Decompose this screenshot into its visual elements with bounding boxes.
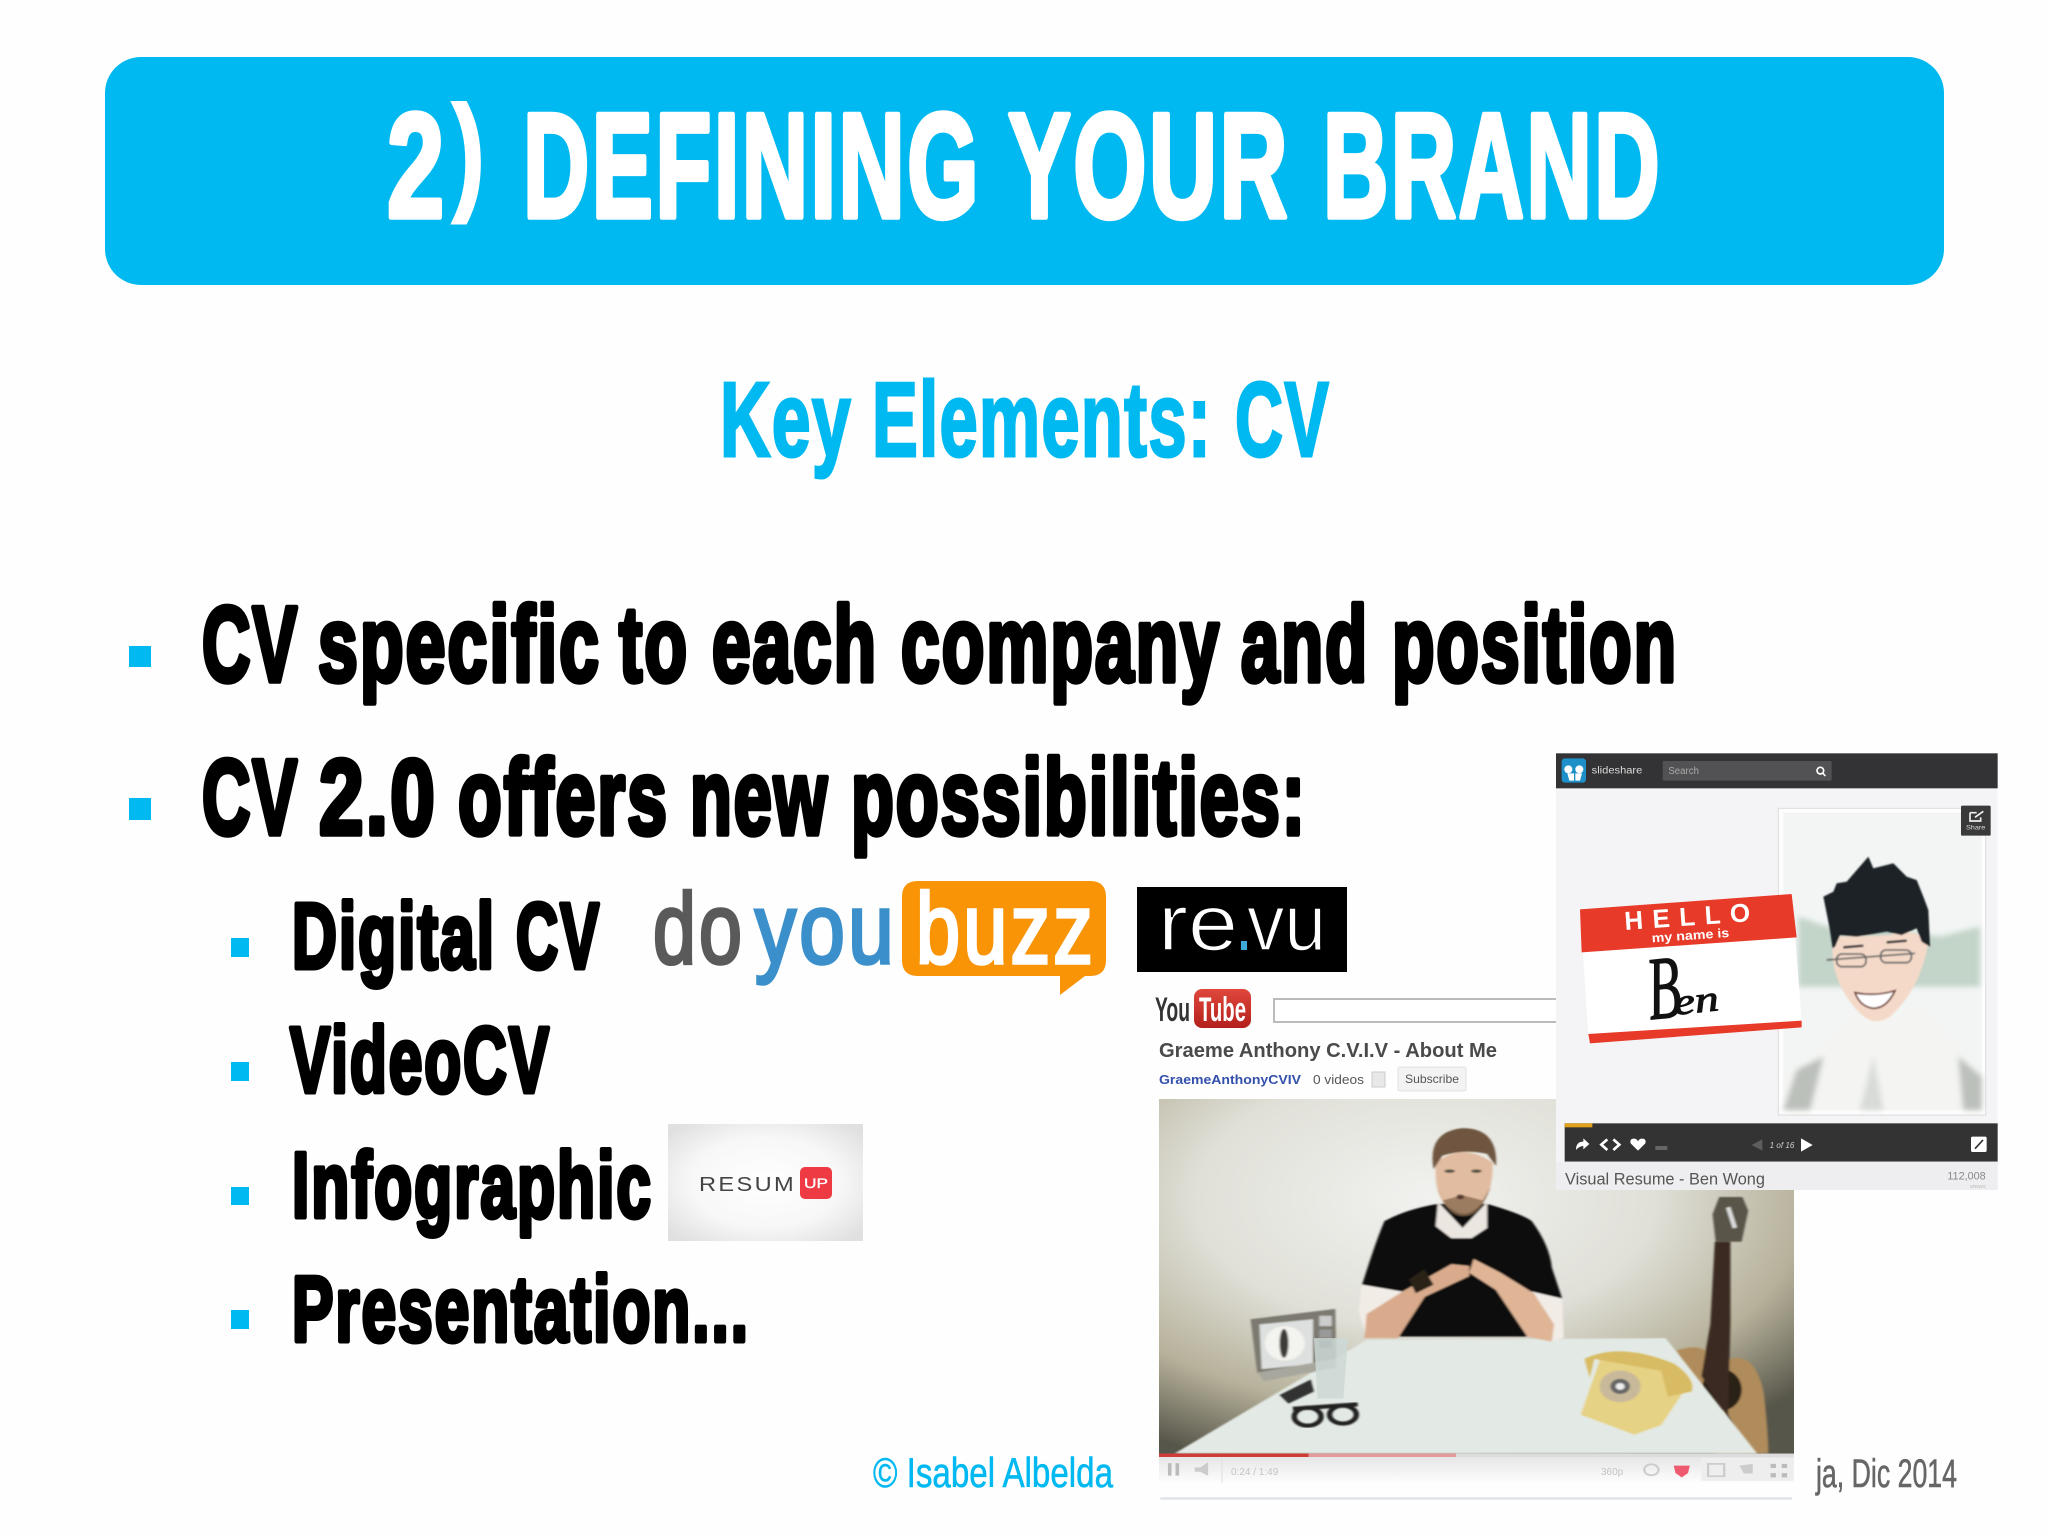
bullet 1 text: and — [1241, 584, 1369, 704]
title text: 2 — [387, 82, 447, 249]
channel row: 0 videos — [1313, 1072, 1365, 1087]
YouTube logo: You — [1155, 991, 1190, 1029]
sub bullet text: Digital CV: CV — [516, 884, 601, 988]
portrait man — [1783, 857, 1982, 1110]
bullet 1 text — [202, 584, 1678, 704]
slideshare footer: 112,008 — [1947, 1170, 1986, 1182]
title text: BRAND — [1323, 82, 1662, 249]
bullet 2 text: CV — [202, 737, 299, 857]
glass of water — [1314, 1338, 1348, 1398]
handwritten signature: B — [1642, 937, 1686, 1039]
slideshare footer: views — [1970, 1184, 1986, 1190]
video frame — [1159, 1099, 1794, 1500]
screenshot: slideshare visual resume — [1556, 753, 1998, 1190]
title text — [387, 81, 1662, 249]
bullet 2 text: offers — [458, 737, 669, 857]
bullet 2 text: new — [690, 737, 829, 857]
logo: revu: re — [1158, 878, 1238, 967]
bullet 1 text: to — [619, 584, 689, 704]
slideshare panel background — [1556, 753, 1998, 1190]
title text: ) — [453, 81, 484, 224]
logo: resumup — [668, 1124, 863, 1241]
player time: 0:24 / 1:49 — [1231, 1467, 1279, 1478]
bullet 1 text: CV — [202, 584, 299, 704]
handwritten signature: en — [1671, 977, 1721, 1023]
portrait photo — [1778, 808, 1986, 1115]
yellow telephone — [1581, 1351, 1692, 1435]
sub bullet marker: Presentation — [231, 1310, 249, 1329]
slideshare footer — [1556, 1162, 1998, 1190]
date credit: ja, Dic 2014 — [1815, 1452, 1957, 1496]
keys — [1280, 1380, 1314, 1404]
sub bullet list — [231, 884, 750, 1361]
title text: YOUR — [1008, 82, 1290, 249]
logo: doyoubuzz: do — [653, 873, 745, 985]
spectacles — [1293, 1404, 1358, 1426]
slideshare player bar — [1565, 1123, 1998, 1162]
channel row: Subscribe — [1405, 1072, 1459, 1086]
bottom rule — [1160, 1497, 1792, 1500]
player controls — [1159, 1457, 1794, 1483]
television — [1251, 1309, 1336, 1381]
subtitle: Key — [720, 361, 852, 479]
logo: resumup: UP — [804, 1175, 828, 1191]
title text: DEFINING — [523, 82, 981, 249]
logo: resumup: RESUM — [699, 1174, 796, 1196]
logo: revu: vu — [1247, 878, 1326, 967]
subtitle: CV — [1235, 361, 1330, 479]
player resolution: 360p — [1601, 1467, 1624, 1478]
YouTube logo — [1155, 989, 1251, 1029]
slideshare footer: Visual Resume - Ben Wong — [1565, 1170, 1765, 1188]
slideshare player bar: 1 of 16 — [1770, 1141, 1795, 1150]
bullet 2 marker — [129, 798, 151, 820]
progress bar — [1159, 1454, 1794, 1457]
channel row: GraemeAnthonyCVIV — [1159, 1072, 1301, 1087]
sub bullet text: Infographic: Infographic — [292, 1133, 653, 1237]
sub bullet text: Presentation: Presentation... — [292, 1257, 750, 1361]
logo: revu — [1137, 878, 1347, 972]
sub bullet marker: VideoCV — [231, 1062, 249, 1081]
sub bullet marker: Infographic — [231, 1187, 249, 1205]
bullet 1 text: company — [901, 584, 1221, 704]
bullet 1 text: specific — [318, 584, 601, 704]
channel row — [1159, 1067, 1466, 1091]
main bullet list — [129, 584, 1678, 857]
man — [1359, 1128, 1564, 1342]
bullet 2 text: possibilities: — [851, 737, 1307, 857]
logo: doyoubuzz: buzz — [916, 873, 1096, 985]
logo: doyoubuzz: you — [755, 873, 897, 985]
share button — [1961, 806, 1991, 836]
logo: doyoubuzz — [653, 873, 1106, 995]
slideshare top bar: slideshare — [1592, 766, 1643, 777]
background trees — [1798, 917, 1980, 987]
logo: revu: . — [1238, 896, 1250, 963]
title banner — [105, 57, 1944, 285]
bullet 1 text: each — [712, 584, 878, 704]
table — [1175, 1338, 1757, 1454]
copyright credit: © Isabel Albelda — [873, 1449, 1114, 1496]
search field — [1274, 999, 1574, 1022]
sub bullet marker: Digital CV — [231, 938, 249, 957]
slideshare top bar — [1556, 753, 1998, 788]
bullet 1 text: position — [1392, 584, 1678, 704]
subtitle — [720, 361, 1330, 479]
HELLO name tag: HELLO — [1623, 897, 1751, 936]
HELLO name tag — [1580, 894, 1802, 1043]
subtitle: Elements: — [872, 361, 1212, 479]
screenshot: YouTube video CV — [1155, 989, 1794, 1500]
bullet 1 marker — [129, 646, 151, 667]
bullet 2 text — [202, 737, 1307, 857]
sub bullet text: VideoCV: VideoCV — [290, 1008, 551, 1112]
share button: Share — [1966, 825, 1986, 831]
slideshare top bar: Search — [1668, 766, 1699, 777]
sub bullet text: Digital CV: Digital — [292, 884, 496, 988]
HELLO name tag: my name is — [1651, 926, 1730, 945]
bullet 2 text: 2.0 — [319, 737, 437, 857]
video title: Graeme Anthony C.V.I.V - About Me — [1159, 1040, 1497, 1062]
YouTube logo: Tube — [1199, 991, 1246, 1029]
video scene: man at table with props — [1159, 1128, 1794, 1500]
guitar — [1677, 1197, 1768, 1454]
